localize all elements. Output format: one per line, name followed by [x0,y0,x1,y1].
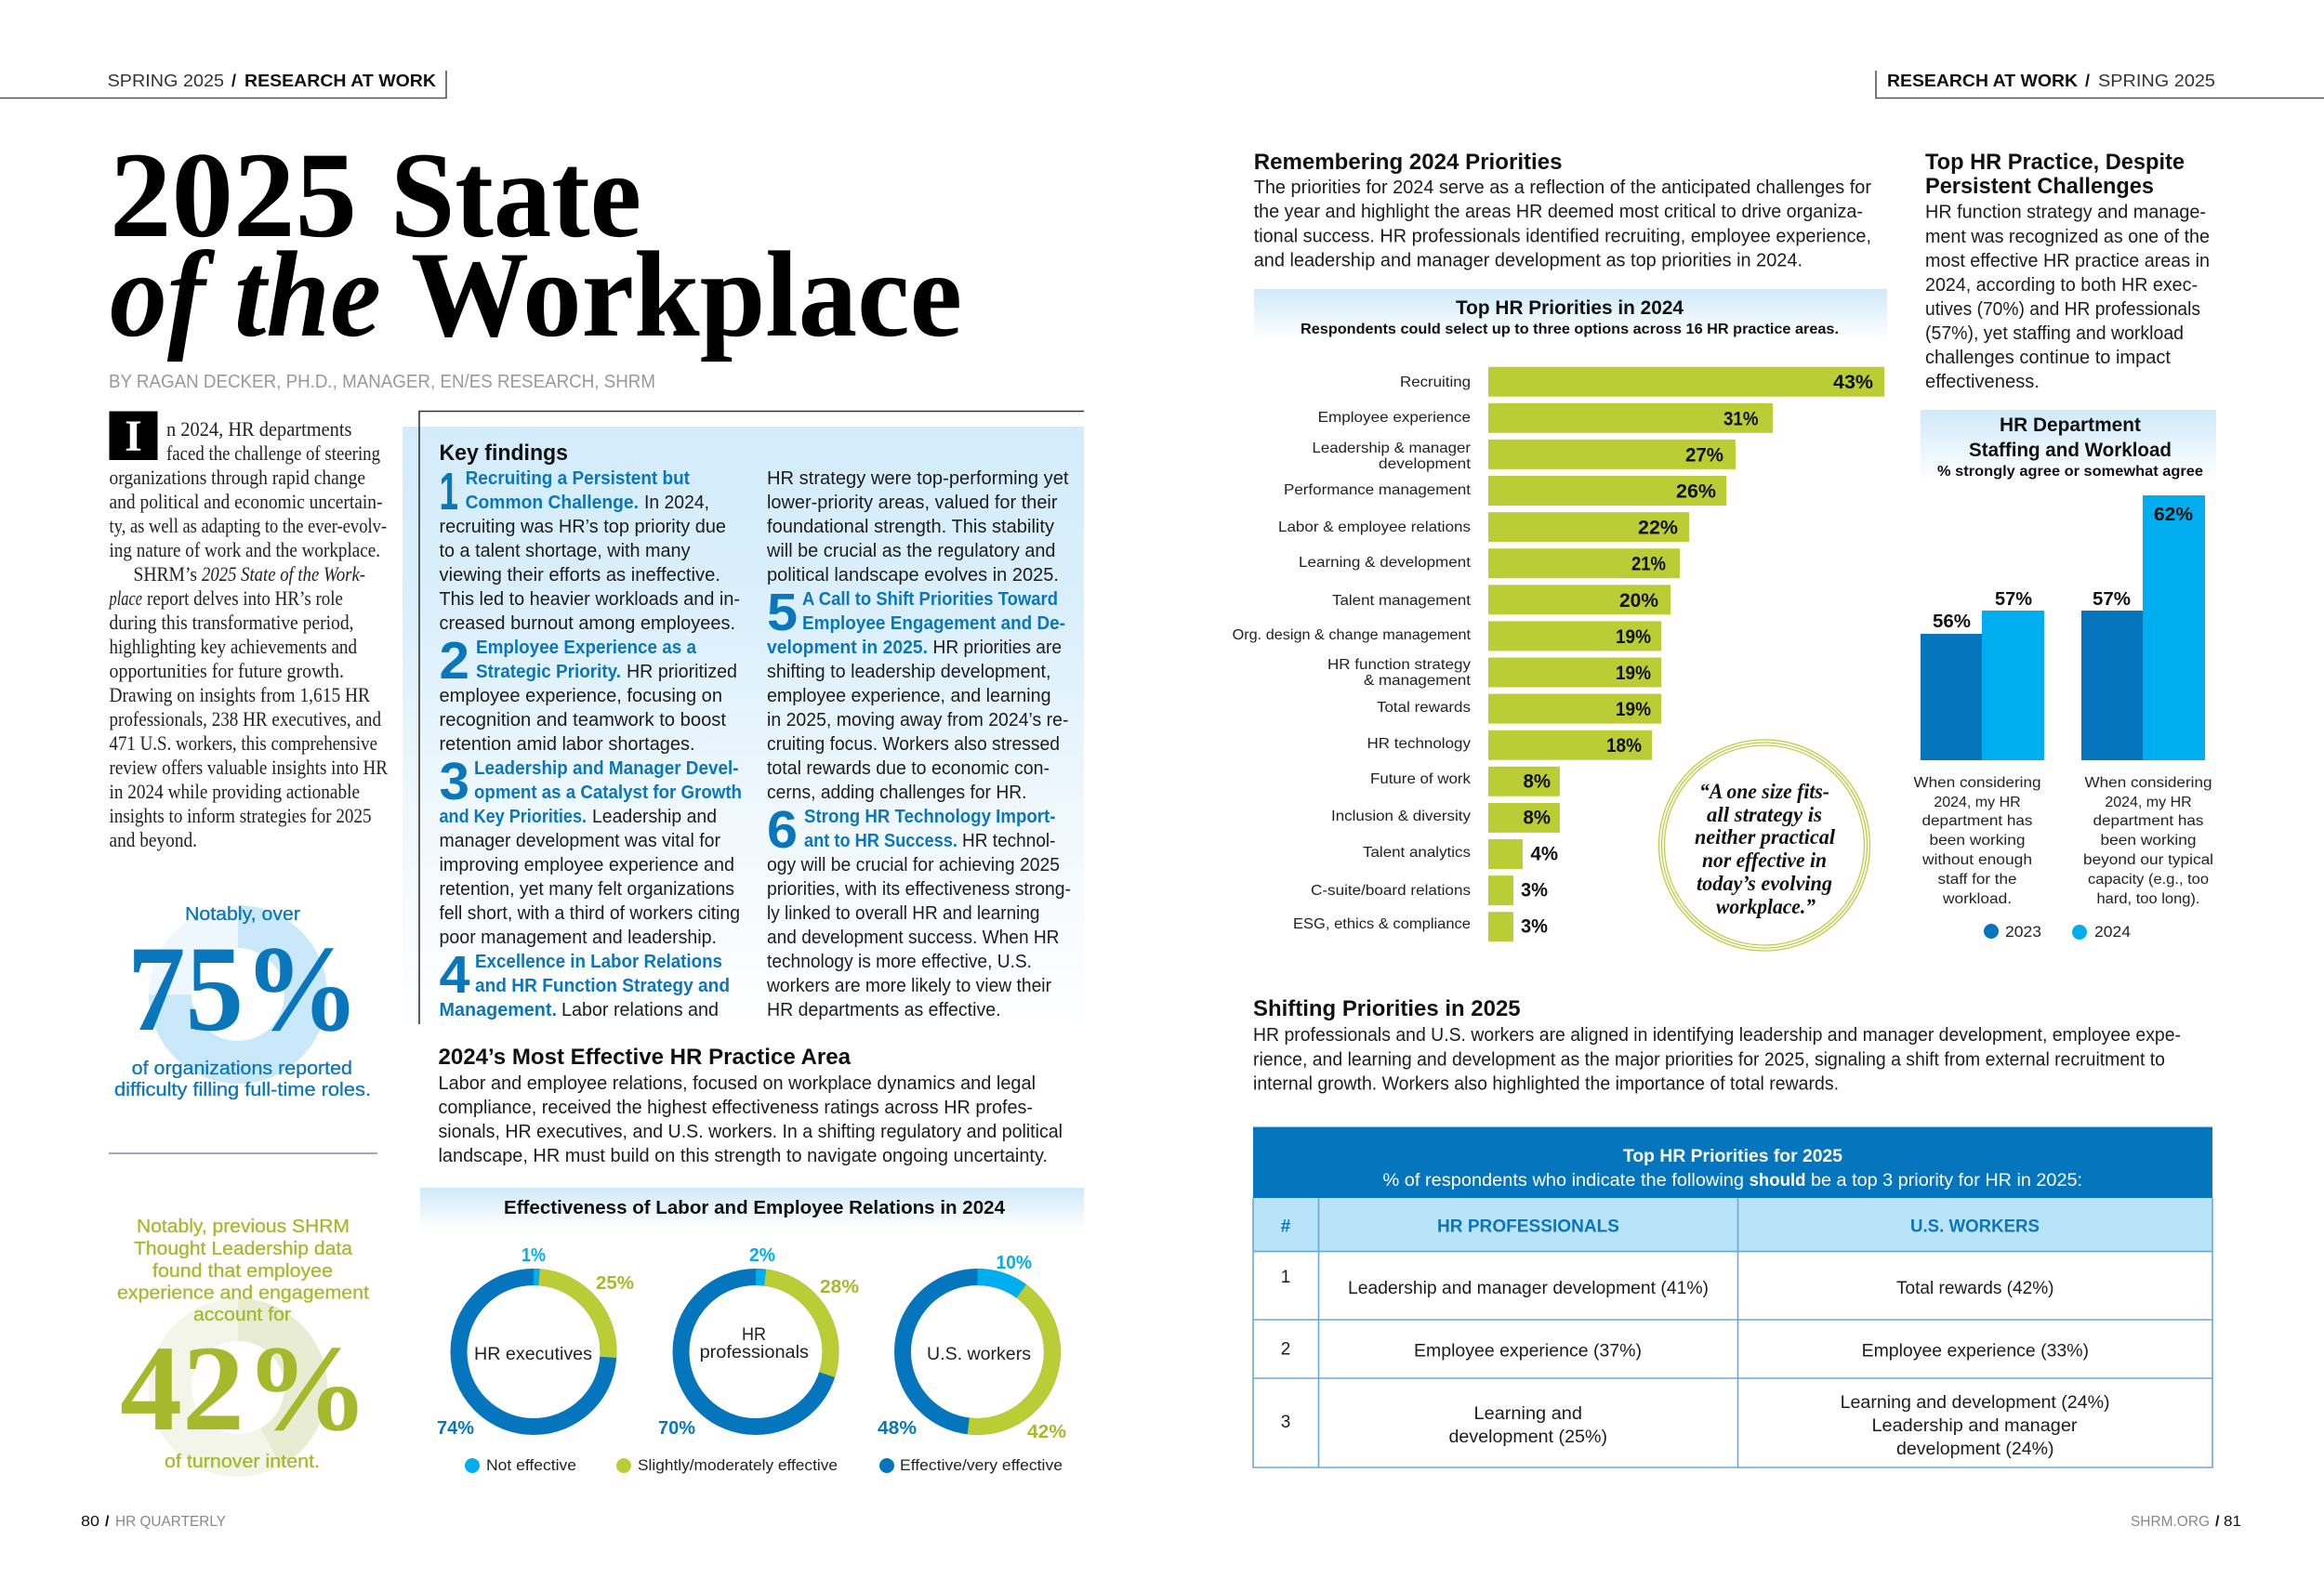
text block: shifting priorities in 2025: Shifting Priorities in 2025 [1253,996,1521,1021]
finding 6: HR departments as effective. [767,1000,1000,1020]
stat callout: 75%: Notably, over [185,904,300,925]
finding 1: 1 [439,462,458,521]
text block: top HR practice: ment was recognized as one of the [1925,227,2210,247]
text block: top HR practice: most effective HR practice areas in [1925,251,2210,271]
bars: not enough staff [1921,589,2044,760]
pull quote in circle: neither practical [1695,825,1836,849]
legend: Not effective [486,1456,576,1474]
text block: remembering 2024 priorities: The priorities for 2024 serve as a reflection of the anticipated challenges for [1254,178,1871,198]
intro text column with drop cap: review offers valuable insights into HR [110,756,388,779]
finding 4: will be crucial as the regulatory and [766,541,1056,561]
text block: top HR practice: (57%), yet staffing and workload [1925,323,2184,344]
footer: right folio: 81 [2224,1514,2241,1530]
row 3: development (24%) [1896,1440,2054,1459]
table column headings [1253,1198,2212,1252]
caption: beyond capacity: beyond our typical [2083,852,2213,868]
donut: HR executives: 74% [437,1418,474,1439]
intro text column with drop cap: report delves into HR’s role [147,586,343,610]
finding 3: opment as a Catalyst for Growth [474,783,742,803]
intro text column with drop cap [108,411,388,851]
drop cap [110,411,158,461]
text block: remembering 2024 priorities: tional success. HR professionals identified recruiting, employee experience, [1254,227,1871,247]
stat callout: 42%: account for [193,1305,291,1325]
caption: not enough staff: 2024, my HR [1934,795,2021,810]
bar values: 3% [1521,916,1548,938]
stat callout: 42%: of turnover intent. [165,1452,320,1472]
legend: Slightly/moderately effective [638,1456,838,1474]
intro text column with drop cap: place [108,586,142,610]
finding 2: HR prioritized [627,662,737,682]
chart: effectiveness donuts [420,1188,1084,1474]
finding 5: HR priorities are [933,638,1062,658]
donut: HR executives: 1% [522,1245,546,1266]
finding 1 [439,462,740,634]
row 1 [1281,1268,2054,1298]
intro text column with drop cap: in 2024 while providing actionable [110,780,360,803]
finding 4 [439,468,1069,1020]
row 2: Employee experience (33%) [1862,1342,2089,1361]
finding 1: In 2024, [644,493,709,513]
donut: U.S. workers: 42% [1027,1422,1066,1442]
row 1: Total rewards (42%) [1896,1279,2054,1298]
pull quote in circle: today’s evolving [1697,872,1832,895]
bar values [1521,372,1873,938]
finding 2: employee experience, focusing on [439,686,722,706]
finding 6: 6 [767,800,798,860]
header: left running head: / [231,72,236,90]
caption: not enough staff: When considering [1913,775,2041,791]
legend [465,1456,1063,1474]
table header: should [1750,1171,1805,1191]
footer: left folio: 80 [81,1514,99,1530]
finding 4: Excellence in Labor Relations [475,952,722,972]
text block: most effective HR practice area [439,1045,1063,1166]
pull quote in circle [1658,740,1870,951]
text block: top HR practice: utives (70%) and HR professionals [1925,299,2200,320]
text block: most effective HR practice area: sionals, HR executives, and U.S. workers. In a shifting regulatory and political [439,1122,1063,1142]
finding 5: employee experience, and learning [767,686,1050,706]
bar values: 19% [1616,663,1651,684]
finding 5: 5 [767,583,798,642]
finding 5: cerns, adding challenges for HR. [767,783,1026,803]
text block: top HR practice: challenges continue to impact [1925,348,2171,368]
bars: not enough staff: 57% [1995,589,2032,610]
bar labels: Learning & development [1299,555,1472,571]
finding 5: total rewards due to economic con- [767,758,1050,779]
table header: % of respondents who indicate the following [1383,1171,1744,1191]
bars: beyond capacity [2081,495,2205,760]
text block: most effective HR practice area: 2024’s Most Effective HR Practice Area [439,1045,852,1070]
finding 4: 4 [439,945,470,1005]
bar labels: Employee experience [1318,410,1471,426]
finding 4: foundational strength. This stability [767,517,1054,537]
intro text column with drop cap: during this transformative period, [110,611,353,634]
row 2: 2 [1281,1340,1290,1360]
pull quote in circle: all strategy is [1707,803,1822,826]
caption: beyond capacity: department has [2093,813,2203,829]
stat callout: 42%: 42% [120,1320,369,1456]
intro text column with drop cap: n 2024, HR departments [166,417,351,441]
finding 5: in 2025, moving away from 2024’s re- [767,710,1069,730]
bar labels: HR function strategy [1327,657,1471,673]
finding 6: technology is more effective, U.S. [767,952,1032,972]
finding 3: and Key Priorities. [439,807,587,827]
donut: HR professionals: 70% [658,1418,695,1439]
bar labels: Total rewards [1377,700,1471,716]
row 3: Learning and development (24%) [1841,1393,2110,1413]
finding 4: HR strategy were top-performing yet [767,468,1069,489]
heading: key findings: Key findings [439,441,568,466]
bars: not enough staff: 56% [1933,612,1971,632]
finding 2: Employee Experience as a [476,638,697,658]
caption: beyond capacity: been working [2101,833,2196,849]
title: 2025 [110,126,357,263]
chart: HR department staffing and workload [1913,410,2216,941]
finding 1: recruiting was HR’s top priority due [439,517,726,537]
finding 3: retention, yet many felt organizations [439,879,734,900]
text block: top HR practice [1925,150,2210,392]
intro text column with drop cap: faced the challenge of steering [166,441,380,465]
donut: HR executives [437,1245,634,1439]
bar labels: Inclusion & diversity [1331,809,1471,824]
row 1: 1 [1281,1268,1290,1287]
chart title [1937,414,2203,480]
caption: not enough staff: been working [1930,833,2025,849]
finding 5: A Call to Shift Priorities Toward [802,589,1058,610]
bar labels: ESG, ethics & compliance [1293,916,1471,932]
row 2 [1281,1340,2089,1361]
bar labels: Talent analytics [1363,845,1471,861]
finding 2: recognition and teamwork to boost [439,710,726,730]
chart title: Effectiveness of Labor and Employee Relations in 2024 [504,1198,1006,1218]
header: left running head: SPRING 2025 [108,72,224,90]
donut: U.S. workers: U.S. workers [927,1345,1031,1364]
intro text column with drop cap: insights to inform strategies for 2025 [110,804,372,827]
text block: top HR practice: Persistent Challenges [1925,174,2154,199]
finding 6: ogy will be crucial for achieving 2025 [767,855,1060,875]
text block: most effective HR practice area: Labor and employee relations, focused on workplace dynamics and legal [439,1073,1036,1094]
caption: beyond capacity: 2024, my HR [2105,795,2192,810]
row 3: Leadership and manager [1872,1416,2078,1436]
chart title: Top HR Priorities in 2024 [1456,297,1684,319]
donut: HR professionals: HR [742,1325,766,1345]
table header: be a top 3 priority for HR in 2025: [1811,1171,2082,1191]
footer: right folio: SHRM.ORG [2131,1514,2210,1530]
bar values: 43% [1833,372,1873,393]
text block: top HR practice: Top HR Practice, Despite [1925,150,2185,175]
legend: Effective/very effective [900,1456,1063,1474]
bar values: 19% [1616,699,1651,720]
caption: not enough staff: without enough [1921,852,2032,868]
finding 2: Strategic Priority. [476,662,621,682]
caption: not enough staff: staff for the [1937,872,2017,888]
intro text column with drop cap: 471 U.S. workers, this comprehensive [110,731,377,755]
finding 3: improving employee experience and [439,855,734,875]
bars [1488,367,1884,941]
chart title: HR Department [2000,414,2141,436]
intro text column with drop cap: ing nature of work and the workplace. [110,538,380,561]
table: top HR priorities for 2025 [1253,1127,2212,1467]
finding 1: viewing their efforts as ineffective. [439,565,720,586]
header: right running head: / [2085,72,2090,90]
finding 4: political landscape evolves in 2025. [767,565,1059,586]
intro text column with drop cap: SHRM’s [134,562,197,586]
text block: top HR practice: effectiveness. [1925,372,2040,392]
stat callout: 42%: experience and engagement [117,1283,369,1303]
header: left running head: RESEARCH AT WORK [244,72,436,90]
chart title: Staffing and Workload [1969,440,2172,461]
title [110,126,962,362]
text block: remembering 2024 priorities: Remembering 2024 Priorities [1254,150,1562,175]
header: right running head: RESEARCH AT WORK [1887,72,2078,90]
bars: beyond capacity: 57% [2093,589,2131,610]
bars: beyond capacity: 62% [2154,505,2193,525]
bar values: 31% [1723,408,1759,429]
footer: right folio: / [2215,1514,2220,1530]
chart subtitle: Respondents could select up to three options across 16 HR practice areas. [1301,322,1839,337]
caption: beyond capacity: hard, too long). [2097,891,2199,907]
intro text column with drop cap: and political and economic uncertain- [110,490,383,513]
donut: HR professionals: professionals [700,1343,809,1362]
pull quote in circle: nor effective in [1702,849,1827,872]
drop cap: I [125,412,142,461]
byline: BY RAGAN DECKER, PH.D., MANAGER, EN/ES RESEARCH, SHRM [109,372,655,392]
text block: remembering 2024 priorities: and leadership and manager development as top priorities in 2024. [1254,251,1802,271]
intro text column with drop cap: and beyond. [110,828,197,851]
finding 2: retention amid labor shortages. [439,734,695,755]
table header [1253,1127,2212,1198]
bar values: 8% [1523,807,1551,828]
finding 1: This led to heavier workloads and in- [439,589,740,610]
legend: 2023 [2005,923,2041,941]
finding 4: lower-priority areas, valued for their [767,493,1058,513]
intro text column with drop cap: Drawing on insights from 1,615 HR [110,683,370,706]
donut: HR executives: 25% [596,1273,634,1294]
bar labels: Org. design & change management [1233,627,1472,643]
caption: not enough staff [1913,775,2041,907]
text block: most effective HR practice area: compliance, received the highest effectiveness ratings across HR profes- [439,1098,1033,1118]
finding 4: Management. [439,1000,557,1020]
finding 5: velopment in 2025. [767,638,928,658]
finding 6: ly linked to overall HR and learning [767,903,1039,924]
bar labels: Recruiting [1400,375,1471,390]
finding 3: manager development was vital for [439,831,720,851]
finding 6: Strong HR Technology Import- [804,807,1056,827]
finding 6: ant to HR Success. [804,831,957,851]
intro text column with drop cap: 2025 State of the Work- [202,562,365,586]
bar labels: development [1379,456,1472,472]
donut: U.S. workers [878,1253,1066,1442]
table column headings: HR PROFESSIONALS [1437,1217,1619,1236]
stat callout: 75%: 75% [127,920,360,1057]
text block: shifting priorities in 2025 [1253,996,2181,1095]
chart: top HR priorities in 2024 [1233,289,1887,941]
bar labels: C-suite/board relations [1311,883,1471,899]
panel: key findings [403,411,1084,1032]
donut: HR executives: HR executives [474,1345,592,1364]
finding 6: priorities, with its effectiveness strong- [767,879,1071,900]
finding 5: Employee Engagement and De- [802,613,1065,634]
finding 1: Common Challenge. [466,493,639,513]
finding 6: and development success. When HR [767,928,1060,948]
text block: top HR practice: 2024, according to both HR exec- [1925,275,2198,296]
footer: left folio: HR QUARTERLY [115,1514,226,1530]
bar values: 27% [1685,444,1723,466]
bar values: 18% [1606,735,1642,757]
legend [1984,923,2131,941]
finding 6: HR technol- [962,831,1056,851]
bar values: 3% [1521,880,1548,901]
bar values: 22% [1638,518,1678,539]
table header: Top HR Priorities for 2025 [1623,1147,1842,1166]
finding 2: 2 [439,631,469,691]
stat callout: 42%: Notably, previous SHRM [137,1217,350,1237]
finding 3: poor management and leadership. [439,928,717,948]
title: of the [110,226,381,362]
finding 3: fell short, with a third of workers citing [439,903,740,924]
bar labels: Talent management [1332,593,1472,609]
caption: beyond capacity: When considering [2084,775,2212,791]
bar values: 8% [1523,770,1551,792]
donut: HR professionals: 28% [820,1277,859,1297]
table column headings: # [1281,1217,1291,1236]
bar labels [1233,375,1472,932]
finding 4: and HR Function Strategy and [475,976,730,996]
icon: pale donut 42 [170,1320,306,1455]
finding 3: Leadership and Manager Devel- [474,758,738,779]
stat callout: 42%: Thought Leadership data [134,1239,353,1259]
row 3: Learning and [1474,1404,1582,1424]
donut: U.S. workers: 48% [878,1418,917,1439]
finding 2 [439,631,737,755]
stat callout: 42%: found that employee [152,1261,333,1282]
legend: 2024 [2094,923,2131,941]
pull quote in circle: “A one size fits- [1699,780,1829,803]
bar values: 4% [1530,844,1558,864]
intro text column with drop cap: highlighting key achievements and [110,635,357,658]
caption: not enough staff: department has [1922,813,2032,829]
stat callout: 75%: of organizations reported [132,1059,352,1079]
bar labels: Labor & employee relations [1278,520,1471,535]
finding 6: workers are more likely to view their [766,976,1051,996]
footer: left folio: / [105,1514,110,1530]
bar values: 19% [1616,626,1651,648]
stat callout: 75% [114,904,371,1100]
finding 5 [767,583,1069,803]
intro text column with drop cap: opportunities for future growth. [110,659,344,682]
title: State [390,126,641,263]
row 3 [1281,1393,2110,1459]
icon: pale donut 75 [170,927,306,1062]
row 2: Employee experience (37%) [1414,1342,1642,1361]
bar labels: Performance management [1284,482,1472,498]
finding 6 [766,800,1071,1020]
stat callout: 42% [117,1217,369,1472]
finding 5: cruiting focus. Workers also stressed [767,734,1060,755]
row 3: development (25%) [1448,1428,1607,1447]
finding 3: 3 [439,752,469,811]
chart title: % strongly agree or somewhat agree [1937,464,2203,480]
row 3: 3 [1281,1413,1290,1432]
bar values: 20% [1619,590,1658,612]
finding 4: Labor relations and [561,1000,719,1020]
caption: beyond capacity [2083,775,2213,907]
finding 1: Recruiting a Persistent but [466,468,690,489]
finding 1: creased burnout among employees. [439,613,735,634]
text block: shifting priorities in 2025: internal growth. Workers also highlighted the importance of total rewards. [1253,1074,1839,1095]
text block: shifting priorities in 2025: rience, and learning and development as the major priorities for 2025, signaling a shift from external recruitment to [1253,1049,2165,1070]
text block: remembering 2024 priorities [1254,150,1871,271]
stat callout: 75%: difficulty filling full-time roles. [114,1080,371,1100]
bar labels: & management [1364,673,1472,689]
finding 5: shifting to leadership development, [767,662,1050,682]
caption: not enough staff: workload. [1942,891,2012,907]
text block: top HR practice: HR function strategy and manage- [1925,203,2206,223]
finding 1: to a talent shortage, with many [439,541,690,561]
header: left running head [0,71,446,99]
pull quote in circle: workplace.” [1716,895,1816,918]
bar labels: Leadership & manager [1313,441,1472,456]
intro text column with drop cap: organizations through rapid change [110,466,365,489]
bar labels: Future of work [1370,771,1472,787]
intro text column with drop cap: ty, as well as adapting to the ever-evolv- [110,514,387,537]
bar values: 26% [1676,481,1716,502]
bar labels: HR technology [1367,736,1471,752]
donut: HR professionals: 2% [749,1245,775,1266]
text block: most effective HR practice area: landscape, HR must build on this strength to navigate ongoing uncertainty. [439,1146,1048,1166]
caption: beyond capacity: capacity (e.g., too [2088,872,2209,888]
table column headings: U.S. WORKERS [1910,1217,2040,1236]
title: Workplace [411,226,962,362]
text block: shifting priorities in 2025: HR professionals and U.S. workers are aligned in identifying leadership and manager development, employee expe- [1253,1025,2181,1046]
row 1: Leadership and manager development (41%) [1348,1279,1709,1298]
donut: U.S. workers: 10% [997,1253,1032,1273]
finding 3 [439,752,742,948]
header: right running head [1876,71,2324,99]
text block: remembering 2024 priorities: the year and highlight the areas HR deemed most critical to drive organiza- [1254,202,1863,222]
intro text column with drop cap: professionals, 238 HR executives, and [110,707,381,730]
bar values: 21% [1631,554,1666,575]
donut: HR professionals [658,1245,859,1439]
header: right running head: SPRING 2025 [2098,72,2215,90]
finding 3: Leadership and [592,807,717,827]
